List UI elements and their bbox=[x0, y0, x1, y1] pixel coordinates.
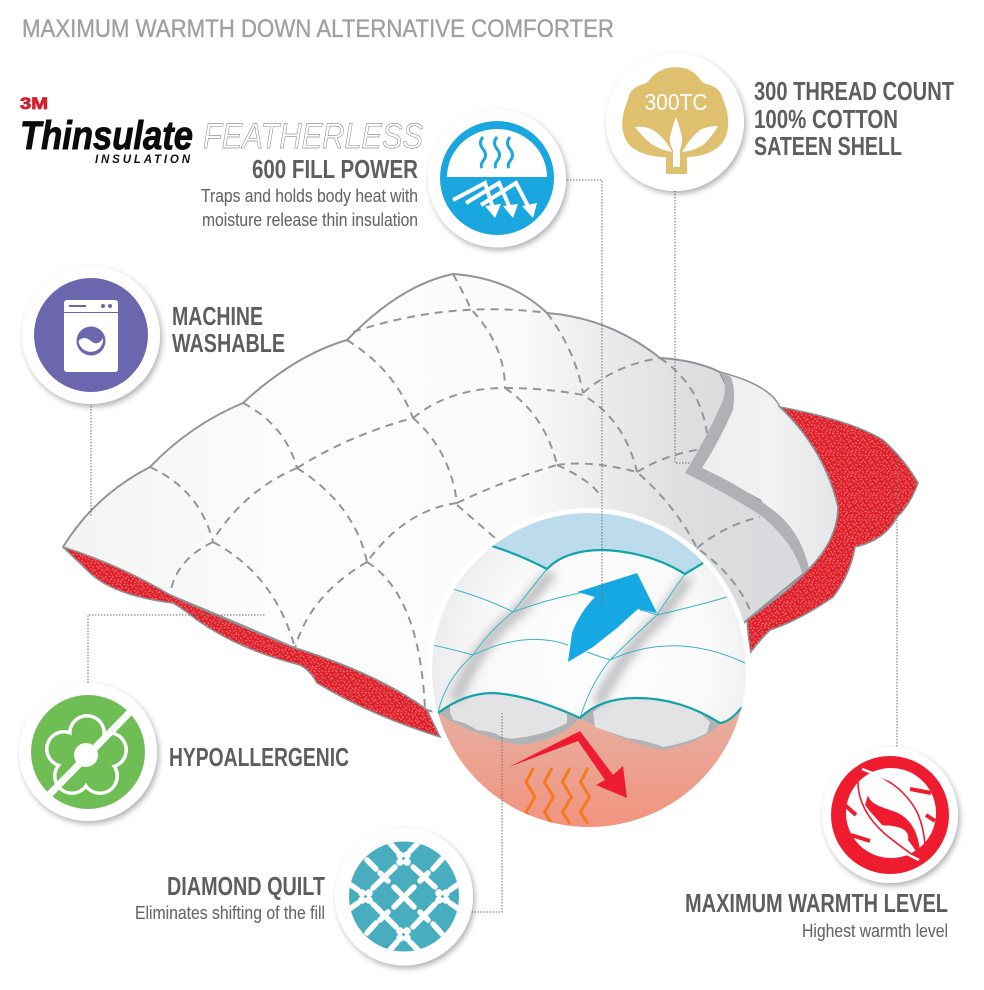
warm lower layer bbox=[425, 700, 755, 830]
icon: washing machine badge bbox=[22, 266, 160, 404]
callout line: hypoallergenic bbox=[88, 615, 266, 683]
callout line: 300TC bbox=[675, 188, 690, 463]
3M Thinsulate logo: Thinsulate bbox=[20, 114, 193, 158]
comforter illustration bbox=[63, 274, 918, 760]
callout line: maximum warmth bbox=[896, 460, 898, 748]
hypoallergenic text: HYPOALLERGENIC bbox=[169, 742, 349, 772]
stitch lines bbox=[433, 546, 745, 723]
diamond quilt text bbox=[135, 871, 325, 923]
icon: moisture release badge bbox=[428, 110, 566, 248]
quilt seams bbox=[150, 274, 760, 710]
300 thread count text: SATEEN SHELL bbox=[754, 131, 902, 161]
fill clusters bbox=[439, 694, 720, 750]
icon: diamond quilt badge bbox=[335, 828, 473, 966]
quilted comforter body bbox=[63, 274, 808, 760]
red fill, right edge bbox=[747, 407, 918, 653]
machine washable text: MACHINE bbox=[172, 301, 263, 331]
maximum warmth text bbox=[685, 888, 948, 941]
featherless wordmark: FEATHERLESS bbox=[203, 117, 423, 156]
orange heat waves bbox=[526, 768, 590, 824]
3M Thinsulate logo: INSULATION bbox=[95, 154, 191, 166]
blue moisture arrow bbox=[568, 573, 657, 662]
600 fill power text: moisture release thin insulation bbox=[202, 210, 418, 230]
cool upper layer bbox=[454, 513, 724, 590]
icon: maximum warmth feather badge bbox=[822, 747, 958, 883]
shell shading bbox=[455, 572, 688, 705]
callout line: machine washable bbox=[90, 403, 92, 517]
cutaway inset circle bbox=[425, 508, 760, 832]
3M Thinsulate logo bbox=[20, 94, 193, 166]
grey inner layer band bbox=[685, 372, 809, 573]
icon: cotton 300TC badge bbox=[606, 53, 744, 191]
600 fill power text: 600 FILL POWER bbox=[252, 154, 418, 184]
title: MAXIMUM WARMTH DOWN ALTERNATIVE COMFORTER bbox=[22, 15, 614, 43]
red fill, left edge bbox=[63, 547, 440, 737]
white shell bbox=[432, 547, 746, 722]
600 fill power text bbox=[201, 154, 418, 230]
300 thread count text: 100% COTTON bbox=[754, 104, 898, 134]
machine washable text bbox=[172, 301, 285, 358]
turned-back flap bbox=[700, 372, 838, 570]
red heat arrow bbox=[509, 731, 627, 798]
callout line: 600 fill power bbox=[567, 180, 602, 605]
maximum warmth text: Highest warmth level bbox=[802, 921, 948, 941]
3M Thinsulate logo: 3M bbox=[20, 94, 48, 113]
diamond quilt text: Eliminates shifting of the fill bbox=[135, 903, 325, 923]
600 fill power text: Traps and holds body heat with bbox=[201, 186, 418, 206]
icon: hypoallergenic flower badge bbox=[19, 683, 157, 821]
300 thread count text bbox=[754, 76, 954, 161]
callout line: diamond quilt bbox=[472, 713, 502, 912]
machine washable text: WASHABLE bbox=[172, 328, 285, 358]
icon: cotton 300TC badge: 300TC bbox=[644, 89, 708, 115]
diamond quilt text: DIAMOND QUILT bbox=[167, 871, 325, 901]
